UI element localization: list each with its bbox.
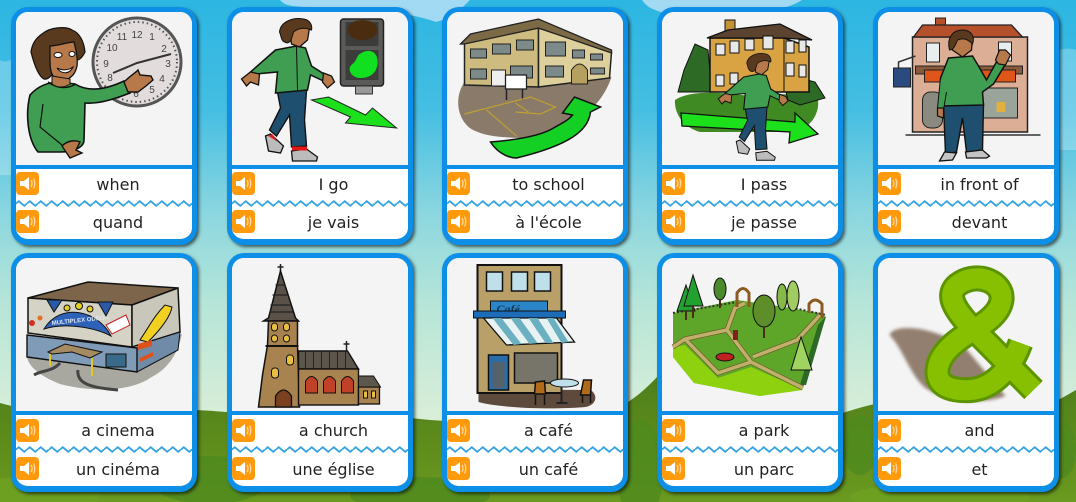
english word: I pass	[741, 175, 787, 194]
card: a cinema / un cinéma	[11, 253, 197, 492]
illustration: stone church	[232, 258, 408, 411]
speaker icon	[662, 210, 685, 233]
illustration: boy pointing at a clock: 9	[103, 59, 109, 70]
illustration: boy pointing at a clock: 10	[106, 43, 118, 54]
card: I go / je vais	[226, 7, 412, 245]
english word: to school	[512, 175, 585, 194]
speaker icon	[447, 419, 470, 442]
illustration: boy pointing at a clock: 11	[117, 32, 128, 43]
illustration: park with paths and trees	[662, 258, 838, 411]
speaker icon	[662, 172, 685, 195]
speaker icon	[878, 419, 901, 442]
wavy divider	[878, 200, 1054, 207]
wavy divider	[16, 200, 192, 207]
illustration: boy passing a house with green arrow	[662, 12, 838, 165]
speaker icon	[878, 457, 901, 480]
english word: when	[96, 175, 140, 194]
english word: in front of	[940, 175, 1019, 194]
french word: un parc	[734, 460, 794, 479]
english word: a café	[524, 421, 573, 440]
speaker icon	[662, 457, 685, 480]
card: and / et	[872, 253, 1058, 492]
speaker icon	[232, 419, 255, 442]
illustration: multiplex cinema	[16, 258, 192, 411]
speaker icon	[232, 457, 255, 480]
speaker icon	[16, 210, 39, 233]
illustration: boy pointing at a clock: 1	[149, 32, 155, 43]
illustration: café with striped awning	[446, 258, 622, 411]
french word: quand	[93, 213, 143, 232]
speaker icon	[447, 172, 470, 195]
english word: a cinema	[81, 421, 155, 440]
wavy divider	[232, 200, 408, 207]
card: when / quand	[11, 7, 197, 245]
illustration: boy pointing at a clock: 12	[131, 30, 143, 41]
wavy divider	[662, 200, 838, 207]
card: a café / un café	[442, 253, 628, 492]
illustration: boy waving in front of a shop	[878, 12, 1054, 165]
speaker icon	[447, 457, 470, 480]
english word: and	[964, 421, 995, 440]
english word: I go	[319, 175, 348, 194]
speaker icon	[878, 210, 901, 233]
wavy divider	[662, 446, 838, 453]
illustration: boy pointing at a clock: 6	[133, 89, 139, 100]
card: I pass / je passe	[657, 7, 843, 245]
french word: devant	[952, 213, 1007, 232]
speaker icon	[662, 419, 685, 442]
speaker icon	[16, 172, 39, 195]
french word: une église	[292, 460, 375, 479]
speaker icon	[878, 172, 901, 195]
illustration: café with striped awning: Café	[496, 302, 520, 316]
illustration: boy pointing at a clock: 4	[159, 74, 165, 85]
card: a church / une église	[226, 253, 412, 492]
speaker icon	[16, 419, 39, 442]
illustration: multiplex cinema: MULTIPLEX ODEON	[52, 315, 109, 327]
card: a park / un parc	[657, 253, 843, 492]
illustration: boy pointing at a clock: 5	[149, 85, 155, 96]
illustration: boy pointing at a clock: 2	[161, 44, 167, 55]
speaker icon	[447, 210, 470, 233]
french word: je passe	[731, 213, 797, 232]
card: in front of / devant	[872, 7, 1058, 245]
french word: je vais	[308, 213, 359, 232]
english word: a park	[739, 421, 789, 440]
card: to school / à l'école	[442, 7, 628, 245]
english word: a church	[299, 421, 368, 440]
wavy divider	[878, 446, 1054, 453]
illustration: boy walking past a green traffic light	[232, 12, 408, 165]
wavy divider	[16, 446, 192, 453]
wavy divider	[447, 200, 623, 207]
french word: à l'école	[515, 213, 582, 232]
french word: et	[971, 460, 988, 479]
wavy divider	[232, 446, 408, 453]
wavy divider	[447, 446, 623, 453]
speaker icon	[232, 210, 255, 233]
french word: un cinéma	[76, 460, 160, 479]
illustration: boy pointing at a clock: 8	[107, 73, 113, 84]
french word: un café	[519, 460, 578, 479]
illustration: boy pointing at a clock	[16, 12, 192, 165]
speaker icon	[16, 457, 39, 480]
speaker icon	[232, 172, 255, 195]
illustration: boy pointing at a clock: 3	[165, 59, 171, 70]
illustration: green ampersand with shadow	[878, 258, 1054, 411]
illustration: school with green curved arrow	[446, 12, 622, 165]
